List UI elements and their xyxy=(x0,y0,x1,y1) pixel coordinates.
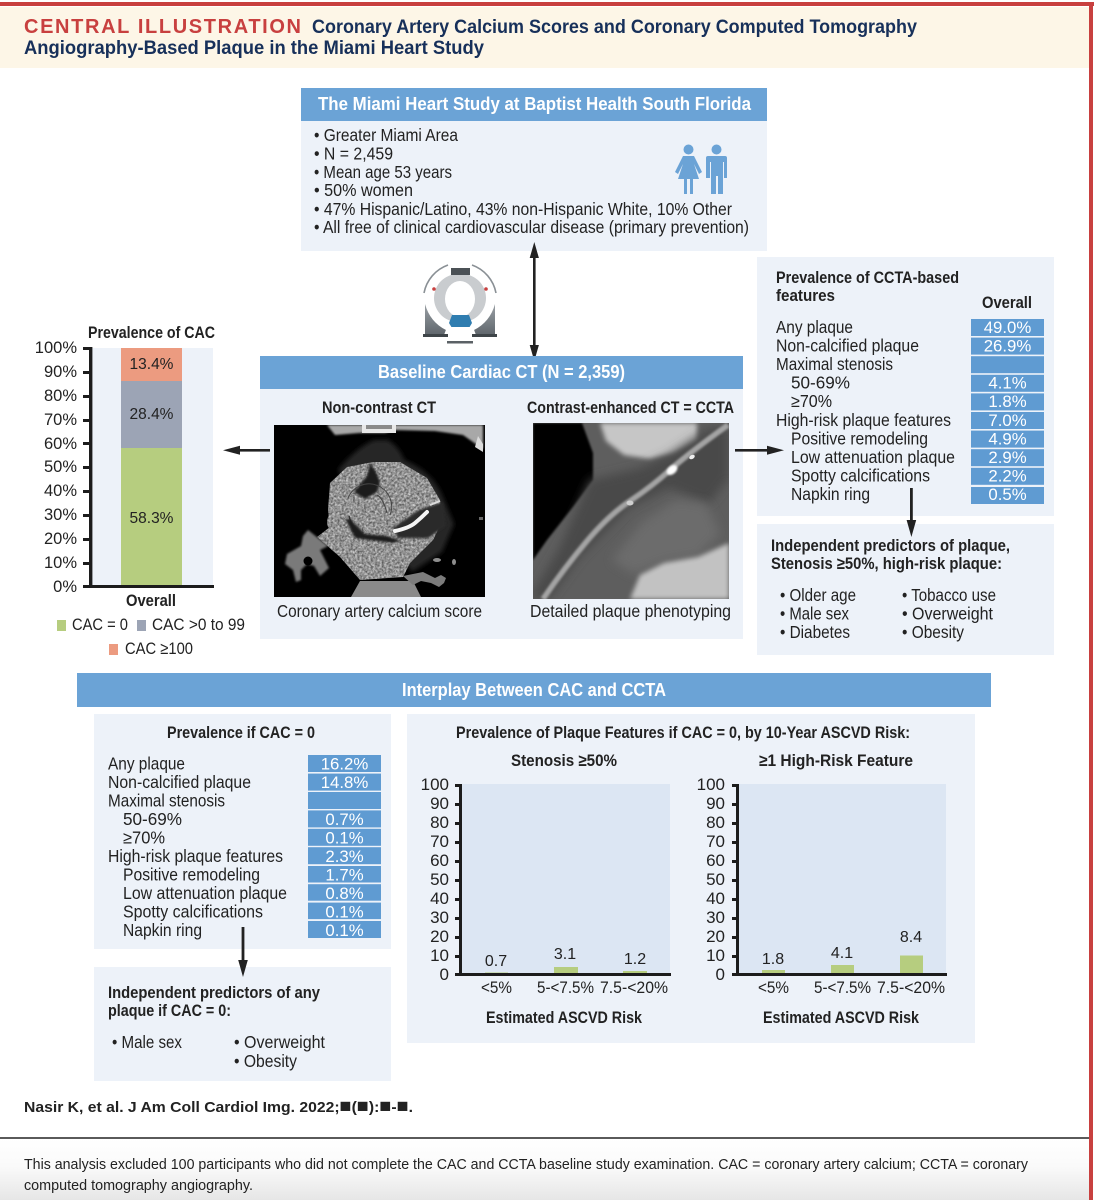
panel heading xyxy=(776,268,959,305)
chart title: ≥1 High-Risk Feature xyxy=(759,751,913,770)
arrow: CAC 0 table to predictors xyxy=(238,927,248,977)
row labels: Napkin ring xyxy=(123,920,202,940)
axes xyxy=(732,784,947,976)
title: CENTRAL ILLUSTRATION xyxy=(24,16,301,38)
chart: prevalence of CAC xyxy=(35,323,245,658)
values: 16.2% xyxy=(321,754,368,774)
predictors list: • Male sex xyxy=(780,604,849,624)
y axis labels: 80 xyxy=(430,813,449,832)
y axis labels: 90 xyxy=(430,794,449,813)
panel: Miami Heart Study xyxy=(301,88,767,251)
stacked bar: 58.3% xyxy=(130,510,174,527)
panel: prevalence if CAC = 0 xyxy=(94,714,391,949)
chart title: Prevalence of CAC xyxy=(88,323,215,342)
bar values: 4.1 xyxy=(831,945,853,962)
category labels xyxy=(481,979,668,997)
subheading: contrast: Contrast-enhanced CT = CCTA xyxy=(527,398,734,417)
y axis labels: 0 xyxy=(440,965,449,984)
arrow: to CAC chart xyxy=(223,446,270,455)
y axis labels: 40 xyxy=(430,889,449,908)
axis labels: 20% xyxy=(44,530,77,548)
axes xyxy=(455,784,671,976)
footer note: computed tomography angiography. xyxy=(24,1178,253,1194)
category labels: 5-<7.5% xyxy=(537,979,594,997)
values: 2.2% xyxy=(988,466,1027,486)
icon: people xyxy=(675,144,727,194)
values: 0.1% xyxy=(325,921,364,940)
values: 4.1% xyxy=(988,374,1027,392)
legend: CAC ≥100 xyxy=(125,639,193,658)
predictors heading: plaque if CAC = 0: xyxy=(108,1001,231,1020)
predictors list: • Diabetes xyxy=(780,622,850,642)
axis labels: 50% xyxy=(44,458,77,476)
values: 1.8% xyxy=(988,392,1027,411)
values xyxy=(321,754,368,940)
chart: stenosis xyxy=(421,751,671,1027)
values: 26.9% xyxy=(984,336,1031,356)
predictors list xyxy=(112,1032,325,1071)
row labels: Maximal stenosis xyxy=(776,354,893,374)
title xyxy=(24,16,917,59)
row labels: Non-calcified plaque xyxy=(776,336,919,356)
stacked bar: 13.4% xyxy=(130,356,174,373)
y axis labels: 90 xyxy=(706,794,725,813)
category labels: 7.5-<20% xyxy=(877,979,945,997)
category labels: <5% xyxy=(758,979,789,997)
legend: CAC = 0 xyxy=(72,615,128,634)
legend xyxy=(57,615,245,658)
axis title: Estimated ASCVD Risk xyxy=(763,1008,920,1027)
y axis labels: 100 xyxy=(697,775,725,794)
row labels: Any plaque xyxy=(776,317,853,337)
predictors heading: Stenosis ≥50%, high-risk plaque: xyxy=(771,554,1002,573)
axis labels: 0% xyxy=(53,578,77,596)
row labels: Low attenuation plaque xyxy=(123,883,287,903)
row labels: Positive remodeling xyxy=(791,428,928,448)
predictors list: • Obesity xyxy=(234,1051,297,1071)
value cells xyxy=(971,319,1044,504)
axis labels: 100% xyxy=(35,339,77,357)
title: Coronary Artery Calcium Scores and Coronary Computed Tomography xyxy=(312,17,917,38)
study facts: • Mean age 53 years xyxy=(314,162,452,182)
bars xyxy=(762,956,923,974)
study facts: • 50% women xyxy=(314,180,413,200)
y axis labels: 20 xyxy=(430,927,449,946)
values: 0.1% xyxy=(325,828,364,848)
row labels: 50-69% xyxy=(123,809,182,829)
axes xyxy=(83,347,214,588)
y axis labels: 0 xyxy=(716,965,725,984)
banner: interplay: Interplay Between CAC and CCTA xyxy=(402,680,666,700)
caption: calcium score: Coronary artery calcium score xyxy=(277,601,482,621)
stacked bar: 28.4% xyxy=(130,406,174,423)
header band xyxy=(0,7,1089,68)
study facts: • 47% Hispanic/Latino, 43% non-Hispanic White, 10% Other xyxy=(314,199,732,219)
predictors list: • Overweight xyxy=(234,1032,325,1052)
heading: study: The Miami Heart Study at Baptist Health South Florida xyxy=(318,93,752,114)
study facts: • Greater Miami Area xyxy=(314,125,458,145)
banner: interplay xyxy=(77,673,991,707)
row labels: High-risk plaque features xyxy=(108,846,283,866)
y axis labels: 60 xyxy=(430,851,449,870)
arrow: table to predictors xyxy=(907,488,916,537)
chart title: Stenosis ≥50% xyxy=(511,751,617,770)
predictors list: • Overweight xyxy=(902,604,993,624)
row labels: Maximal stenosis xyxy=(108,790,225,810)
values: 0.1% xyxy=(325,902,364,922)
arrow: study to baseline CT xyxy=(530,242,539,361)
bar values xyxy=(762,929,922,968)
row labels: Any plaque xyxy=(108,754,185,774)
y axis labels: 100 xyxy=(421,775,449,794)
predictors heading: Independent predictors of any xyxy=(108,983,321,1002)
row labels xyxy=(108,754,287,940)
values: 0.5% xyxy=(988,485,1027,504)
predictors list: • Tobacco use xyxy=(902,585,996,605)
y axis labels xyxy=(421,775,449,984)
category labels xyxy=(758,979,945,997)
axis labels: 90% xyxy=(44,363,77,381)
y axis labels: 40 xyxy=(706,889,725,908)
y axis labels: 10 xyxy=(706,946,725,965)
footer note: This analysis excluded 100 participants who did not complete the CAC and CCTA baseline study examination. CAC = coronary artery calcium; CCTA = coronary xyxy=(24,1157,1029,1173)
image: CCTA xyxy=(529,423,729,599)
panel: plaque features by ASCVD risk xyxy=(407,714,975,1043)
axis labels: 60% xyxy=(44,435,77,453)
axis labels: 30% xyxy=(44,506,77,524)
row labels: Spotty calcifications xyxy=(791,466,930,486)
values: 2.9% xyxy=(988,448,1027,467)
y axis labels: 60 xyxy=(706,851,725,870)
row labels xyxy=(776,317,955,504)
panel heading: features xyxy=(776,286,835,305)
icon: CT scanner xyxy=(423,262,497,344)
category labels: <5% xyxy=(481,979,512,997)
panel heading: Prevalence if CAC = 0 xyxy=(167,723,315,742)
panel heading: Prevalence of Plaque Features if CAC = 0, by 10-Year ASCVD Risk: xyxy=(456,723,910,742)
caption: plaque phenotyping: Detailed plaque phenotyping xyxy=(530,601,731,621)
y axis labels: 10 xyxy=(430,946,449,965)
row labels: Non-calcified plaque xyxy=(108,772,251,792)
y axis labels: 70 xyxy=(706,832,725,851)
bar values: 1.8 xyxy=(762,951,784,968)
bars xyxy=(485,967,647,974)
predictors list: • Older age xyxy=(780,585,856,605)
heading: baseline CT: Baseline Cardiac CT (N = 2,359) xyxy=(378,361,625,382)
study facts: • All free of clinical cardiovascular disease (primary prevention) xyxy=(314,217,749,237)
citation: Nasir K, et al. J Am Coll Cardiol Img. 2022; ■(■):■-■. xyxy=(24,1096,413,1117)
values: 7.0% xyxy=(988,411,1027,430)
subheading: non-contrast: Non-contrast CT xyxy=(322,398,437,417)
row labels: Positive remodeling xyxy=(123,864,260,884)
axis title: Estimated ASCVD Risk xyxy=(486,1008,643,1027)
row labels: 50-69% xyxy=(791,372,850,392)
bar values: 8.4 xyxy=(900,929,922,946)
title: Angiography-Based Plaque in the Miami Heart Study xyxy=(24,38,484,59)
panel: CCTA prevalence xyxy=(757,257,1054,516)
y axis labels: 50 xyxy=(706,870,725,889)
values: 0.7% xyxy=(325,810,364,829)
values: 14.8% xyxy=(321,773,368,792)
row labels: High-risk plaque features xyxy=(776,410,951,430)
axis labels xyxy=(35,339,77,596)
row labels: Low attenuation plaque xyxy=(791,447,955,467)
y axis labels: 70 xyxy=(430,832,449,851)
axis labels: 40% xyxy=(44,482,77,500)
chart: high-risk feature xyxy=(697,751,947,1027)
image: non-contrast CT xyxy=(274,425,485,597)
predictors heading: Independent predictors of plaque, xyxy=(771,536,1010,555)
y axis labels: 80 xyxy=(706,813,725,832)
category labels: 5-<7.5% xyxy=(814,979,871,997)
y axis labels: 30 xyxy=(430,908,449,927)
row labels: ≥70% xyxy=(791,391,832,411)
values xyxy=(984,318,1031,504)
column heading: Overall xyxy=(982,293,1032,312)
row labels: Napkin ring xyxy=(791,484,870,504)
row labels: Spotty calcifications xyxy=(123,902,263,922)
values: 0.8% xyxy=(325,884,364,903)
stacked bar xyxy=(121,348,182,585)
y axis labels xyxy=(697,775,725,984)
panel: independent predictors xyxy=(757,524,1054,655)
predictors list xyxy=(780,585,996,642)
values: 49.0% xyxy=(984,318,1031,337)
bar values: 0.7 xyxy=(485,953,507,970)
value cells xyxy=(308,755,381,938)
category labels: 7.5-<20% xyxy=(600,979,668,997)
values: 1.7% xyxy=(325,866,364,884)
predictors list: • Obesity xyxy=(902,622,964,642)
predictors heading xyxy=(771,536,1010,573)
predictors list: • Male sex xyxy=(112,1032,182,1052)
bar values: 1.2 xyxy=(624,951,646,968)
panel: baseline cardiac CT xyxy=(260,356,743,639)
values: 4.9% xyxy=(988,430,1027,448)
values: 2.3% xyxy=(325,847,364,866)
study facts: • N = 2,459 xyxy=(314,144,393,164)
y axis labels: 20 xyxy=(706,927,725,946)
axis labels: 10% xyxy=(44,554,77,572)
panel heading: Prevalence of CCTA-based xyxy=(776,268,959,287)
bar values: 3.1 xyxy=(554,946,576,963)
predictors heading xyxy=(108,983,321,1020)
bar values xyxy=(485,946,646,970)
row labels: ≥70% xyxy=(123,828,165,848)
y axis labels: 30 xyxy=(706,908,725,927)
legend: CAC >0 to 99 xyxy=(152,615,245,634)
arrow: to CCTA table xyxy=(735,446,784,455)
axis labels: 70% xyxy=(44,411,77,429)
panel: predictors if CAC = 0 xyxy=(94,967,391,1081)
y axis labels: 50 xyxy=(430,870,449,889)
study facts xyxy=(314,125,749,237)
category label: Overall xyxy=(126,591,176,610)
footer note xyxy=(0,1137,1089,1200)
axis labels: 80% xyxy=(44,387,77,405)
